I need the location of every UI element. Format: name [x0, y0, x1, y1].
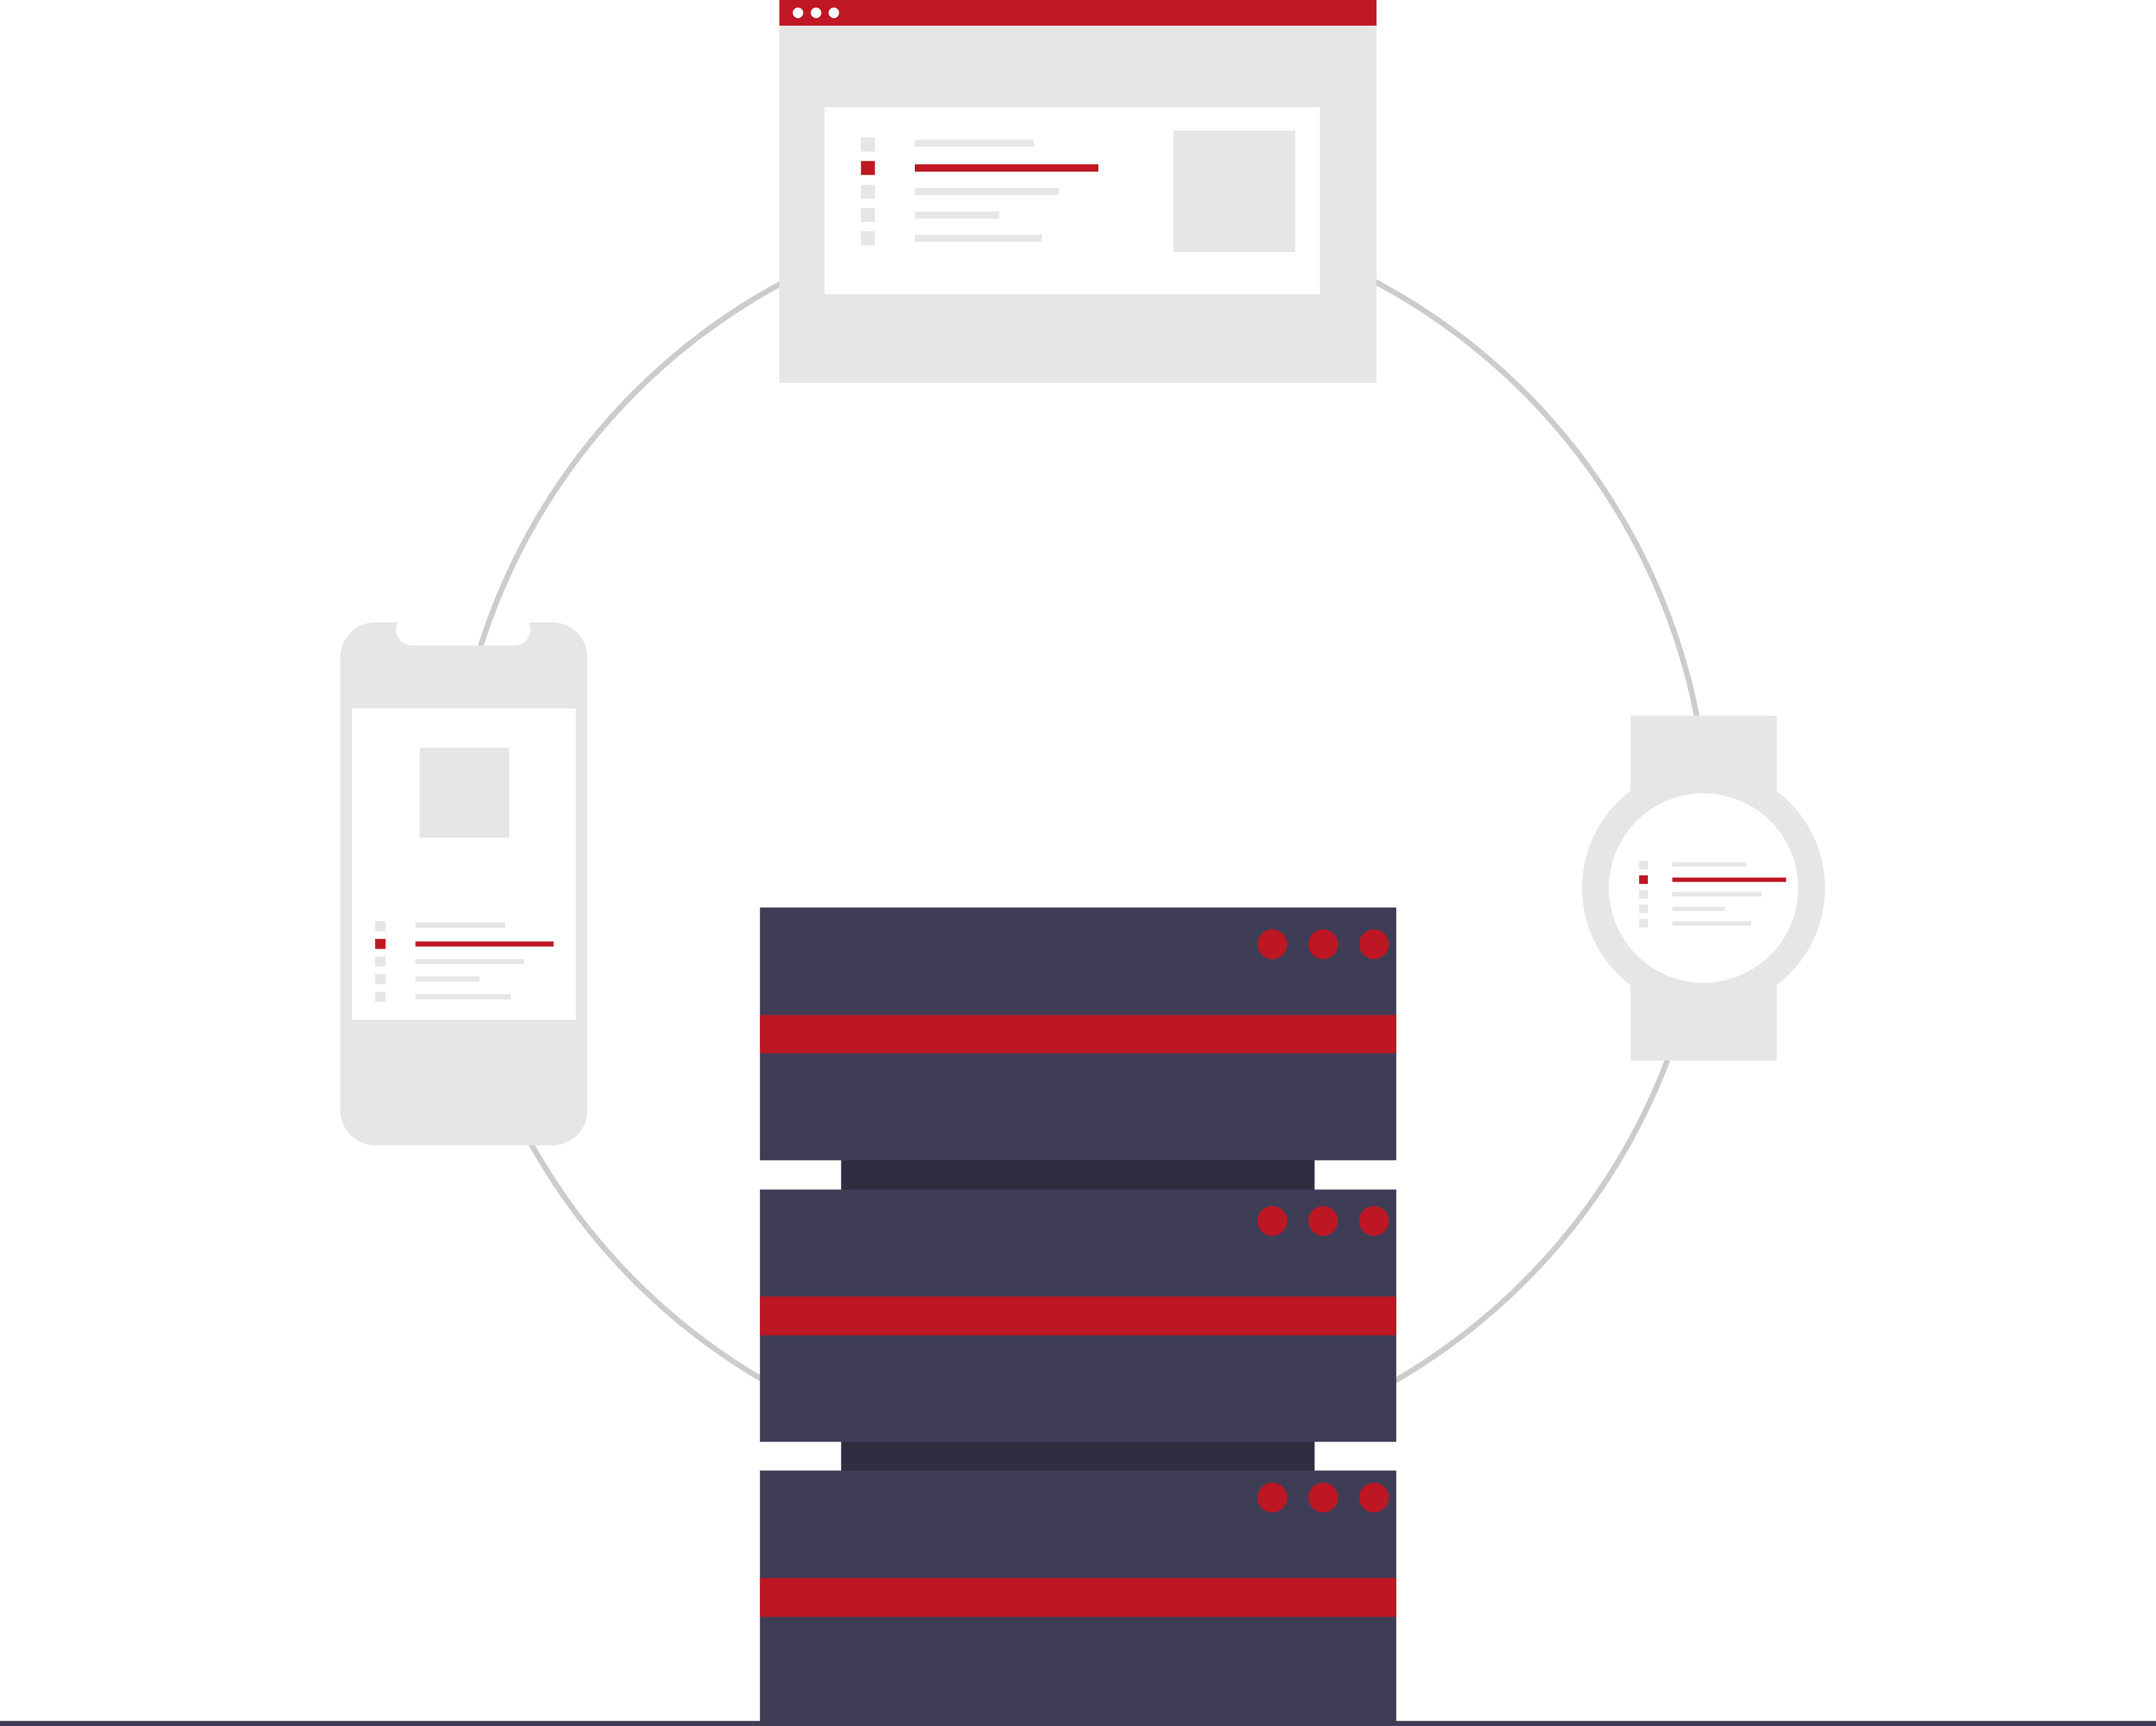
connection ring [451, 208, 1708, 1466]
phone body [340, 622, 587, 1146]
server unit 1 [760, 907, 1396, 1160]
browser window [780, 0, 1376, 383]
phone list lines [415, 922, 554, 999]
browser screen [825, 107, 1320, 294]
server unit 3 [760, 1471, 1396, 1726]
server stack [760, 907, 1396, 1726]
watch list bullets [1639, 861, 1648, 928]
smartwatch [1582, 716, 1825, 1061]
browser image placeholder [1174, 131, 1295, 252]
browser title bar [780, 0, 1376, 26]
watch list lines [1672, 862, 1786, 925]
watch face [1609, 794, 1798, 982]
server unit 2 [760, 1189, 1396, 1442]
server connectors [841, 1160, 1315, 1471]
browser list bullets [861, 138, 875, 245]
smartphone [340, 622, 587, 1146]
watch strap [1630, 716, 1777, 1061]
browser window dots [792, 8, 839, 18]
ground line [0, 1721, 2156, 1726]
phone screen [352, 709, 576, 1020]
browser list lines [915, 140, 1098, 242]
phone list bullets [375, 921, 386, 1002]
phone image placeholder [420, 748, 509, 837]
browser body [780, 0, 1376, 383]
watch case [1582, 767, 1825, 1009]
